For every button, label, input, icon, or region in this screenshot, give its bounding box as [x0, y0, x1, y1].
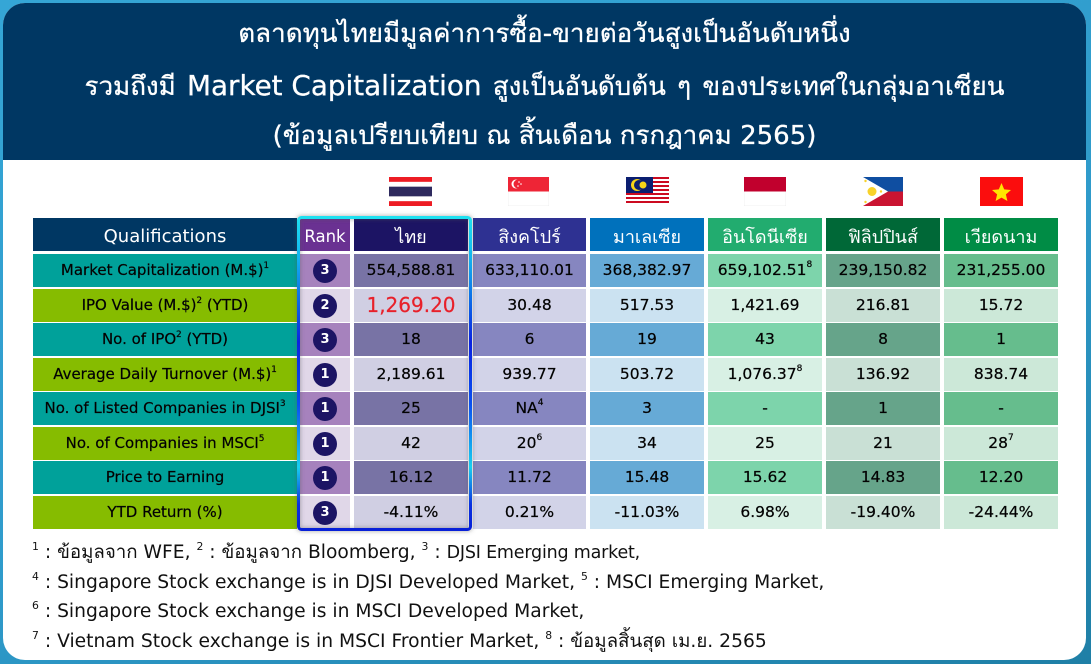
row: market capitalization: 368,382.97	[603, 260, 691, 278]
icon: Vietnam flag	[980, 177, 1023, 206]
row: YTD return: -19.40%	[851, 502, 915, 520]
row: companies in MSCI: No. of Companies in MSCI5	[66, 434, 264, 452]
row: YTD return: 6.98%	[740, 502, 790, 520]
row: price to earning: 16.12	[389, 468, 433, 486]
row: listed companies in DJSI: NA4	[516, 398, 543, 416]
row: companies in MSCI: 206	[517, 433, 542, 452]
icon: Singapore flag	[508, 177, 549, 206]
row: price to earning: 15.48	[625, 468, 669, 486]
title line 1: ตลาดทุนไทยมีมูลค่าการซื้อ-ขายต่อวันสูงเป็นอันดับหนึ่ง	[238, 19, 851, 49]
row: IPO value: IPO Value (M.$)2 (YTD)	[82, 296, 248, 314]
icon: Philippines flag	[863, 177, 903, 206]
row: IPO value: 216.81	[856, 296, 910, 314]
row: price to earning: 11.72	[507, 468, 552, 486]
row: YTD return: -4.11%	[384, 502, 438, 520]
row: IPO value: 1,421.69	[730, 296, 800, 314]
row: YTD return: -24.44%	[969, 502, 1033, 520]
title line 3: (ข้อมูลเปรียบเทียบ ณ สิ้นเดือน กรกฎาคม 2565)	[273, 121, 816, 151]
row: number of IPO: 1	[996, 330, 1006, 348]
table header row: Qualifications	[104, 226, 226, 247]
row: YTD return: 0.21%	[505, 502, 554, 520]
footnote 4: 7 : Vietnam Stock exchange is in MSCI Frontier Market, 8 : ข้อมูลสิ้นสุด เม.ย. 2565	[32, 629, 767, 652]
row: listed companies in DJSI: 1	[878, 398, 888, 416]
row: market capitalization: 3	[320, 263, 330, 278]
row: market capitalization: 239,150.82	[839, 260, 927, 278]
row: number of IPO: 19	[637, 330, 657, 348]
row: companies in MSCI: 287	[988, 433, 1014, 452]
row: listed companies in DJSI: 3	[642, 398, 652, 416]
row: number of IPO: No. of IPO2 (YTD)	[102, 330, 228, 348]
row: listed companies in DJSI: 25	[401, 398, 421, 416]
row: YTD return: 3	[320, 505, 330, 520]
icon: Indonesia flag	[744, 177, 786, 206]
title banner	[3, 3, 1086, 160]
row: IPO value: 15.72	[979, 296, 1023, 314]
row: IPO value: 1,269.20	[366, 292, 456, 316]
row: price to earning: 1	[320, 470, 330, 485]
title line 2: รวมถึงมี Market Capitalization สูงเป็นอันดับต้น ๆ ของประเทศในกลุ่มอาเซียน	[84, 69, 1004, 102]
row: average daily turnover: 1	[320, 367, 330, 382]
table header row: Rank	[304, 227, 346, 246]
row: average daily turnover: 939.77	[502, 364, 557, 382]
row: listed companies in DJSI: 1	[320, 401, 330, 416]
table header row: ไทย	[395, 227, 427, 248]
highlight box: Thailand column	[294, 213, 475, 534]
row: YTD return: YTD Return (%)	[107, 502, 223, 520]
row: companies in MSCI: 21	[873, 434, 893, 452]
row: price to earning: 14.83	[861, 468, 905, 486]
row: average daily turnover: 503.72	[620, 364, 674, 382]
row: companies in MSCI: 1	[320, 436, 330, 451]
row: average daily turnover: 838.74	[974, 364, 1028, 382]
table header row: มาเลเซีย	[613, 227, 681, 248]
row: listed companies in DJSI: No. of Listed Companies in DJSI3	[44, 398, 286, 416]
row: average daily turnover: Average Daily Turnover (M.$)1	[53, 364, 277, 382]
row: price to earning: 12.20	[979, 468, 1023, 486]
row: average daily turnover: 1,076.378	[728, 364, 802, 382]
row: market capitalization: Market Capitalization (M.$)1	[61, 260, 269, 278]
icon: Thailand flag	[389, 177, 432, 206]
row: market capitalization	[33, 254, 1058, 287]
row: listed companies in DJSI	[33, 392, 1058, 425]
row: companies in MSCI: 25	[755, 434, 775, 452]
footnote 3: 6 : Singapore Stock exchange is in MSCI Developed Market,	[32, 599, 584, 622]
row: YTD return: -11.03%	[615, 502, 679, 520]
row: listed companies in DJSI: -	[762, 398, 768, 416]
row: number of IPO: 8	[878, 330, 888, 348]
table header row: สิงคโปร์	[498, 227, 561, 248]
table header row: อินโดนีเซีย	[722, 227, 808, 248]
row: companies in MSCI	[33, 427, 1058, 460]
row: market capitalization: 554,588.81	[367, 260, 455, 278]
row: number of IPO: 43	[755, 330, 775, 348]
icon: Malaysia flag	[626, 177, 669, 203]
row: companies in MSCI: 34	[637, 434, 657, 452]
row: number of IPO	[33, 323, 1058, 356]
row: number of IPO: 18	[401, 330, 421, 348]
row: number of IPO: 3	[320, 332, 330, 347]
footnote 2: 4 : Singapore Stock exchange is in DJSI Developed Market, 5 : MSCI Emerging Market,	[32, 570, 824, 593]
row: number of IPO: 6	[525, 330, 534, 348]
row: companies in MSCI: 42	[401, 434, 421, 452]
row: price to earning: Price to Earning	[106, 468, 224, 486]
row: IPO value	[33, 289, 1058, 322]
row: market capitalization: 633,110.01	[485, 260, 574, 278]
row: price to earning: 15.62	[743, 468, 787, 486]
row: IPO value: 2	[320, 298, 330, 313]
row: average daily turnover: 2,189.61	[376, 364, 446, 382]
row: IPO value: 517.53	[620, 296, 674, 314]
row: market capitalization: 659,102.518	[718, 260, 812, 278]
row: IPO value: 30.48	[507, 296, 552, 314]
row: average daily turnover	[33, 358, 1058, 391]
table header row: เวียดนาม	[965, 227, 1037, 248]
row: price to earning	[33, 461, 1058, 494]
row: listed companies in DJSI: -	[998, 398, 1004, 416]
row: average daily turnover: 136.92	[856, 364, 910, 382]
row: market capitalization: 231,255.00	[957, 260, 1045, 278]
table header row: ฟิลิปปินส์	[848, 227, 918, 248]
footnote 1: 1 : ข้อมูลจาก WFE, 2 : ข้อมูลจาก Bloomberg, 3 : DJSI Emerging market,	[32, 540, 640, 563]
row: YTD return	[33, 496, 1058, 529]
table header row	[33, 218, 1058, 251]
